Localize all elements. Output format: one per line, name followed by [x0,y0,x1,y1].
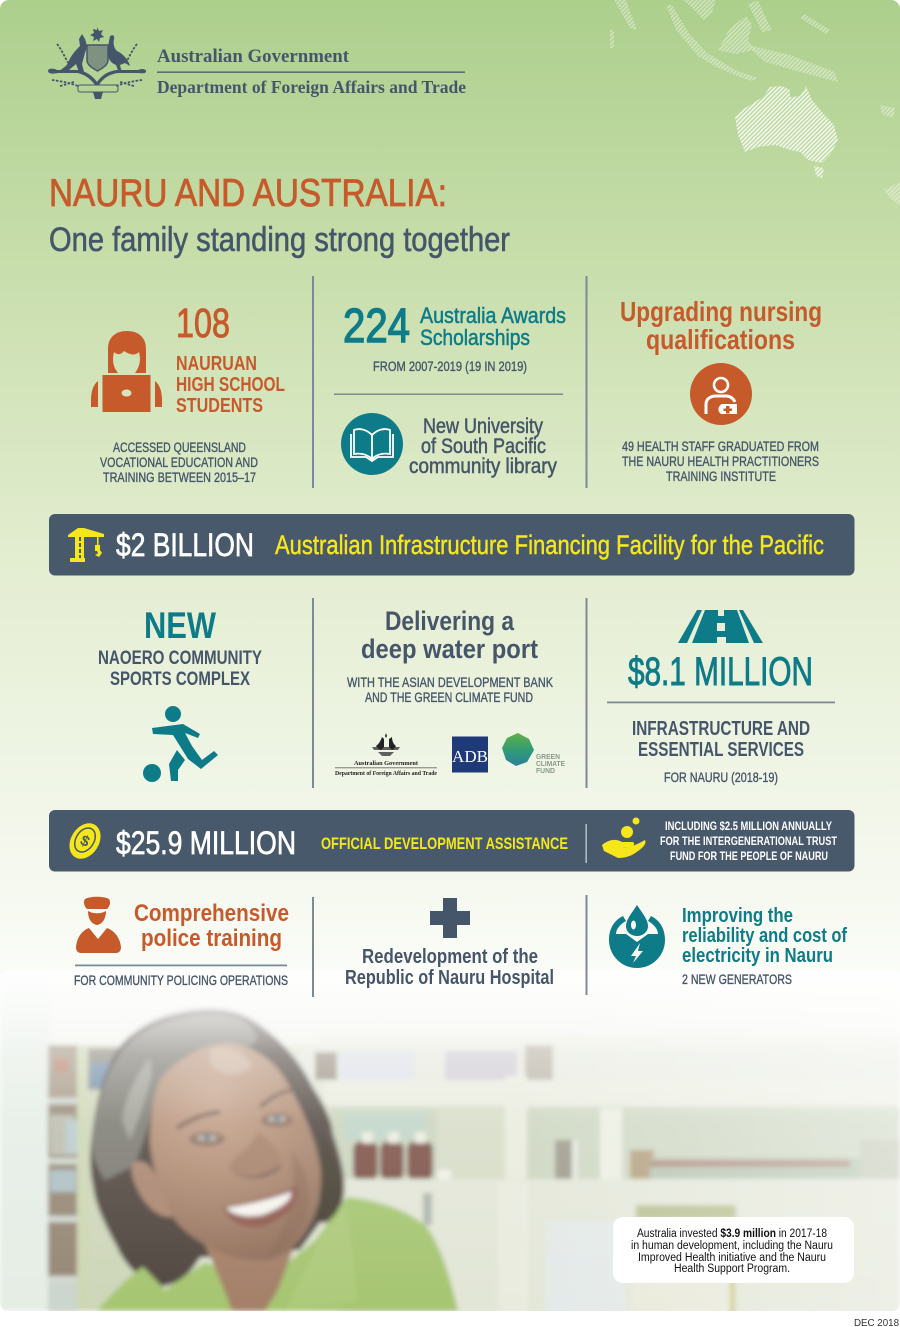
logo: Australian Government coat of arms [48,27,146,99]
upper shelf items [320,1035,900,1047]
label: Nauruan high school students [176,353,285,417]
title: NAURU AND AUSTRALIA: [49,172,447,215]
note [660,819,838,863]
label: sports complex: SPORTS COMPLEX [110,669,250,690]
heading: Comprehensive [134,900,289,927]
heading: upgrading nursing: qualifications [646,324,795,355]
heading: Redevelopment of the [362,945,538,968]
counter [340,1179,900,1314]
note: FOR THE INTERGENERATIONAL TRUST [660,834,838,848]
banner: $2 billion [49,514,854,576]
face [150,1043,321,1260]
callout: human development investment: Australia invested $3.9 million in 2017-18 [637,1228,827,1240]
description: AND THE GREEN CLIMATE FUND [365,690,533,705]
icon: police officer [76,897,121,953]
note: FUND FOR THE PEOPLE OF NAURU [670,849,828,863]
logo: ADB [452,736,488,772]
lower shelf interior [330,1109,900,1181]
heading: new: NEW [144,605,216,646]
panel: high school students [91,300,285,485]
heading: Australia Awards Scholarships: Australia Awards [420,303,566,328]
panel: sports complex [98,605,262,782]
callout: human development investment [613,1217,854,1283]
heading: Republic of Nauru Hospital [345,966,554,989]
left shelves [48,1045,78,1311]
description: WITH THE ASIAN DEVELOPMENT BANK [347,675,553,690]
period: FOR NAURU (2018-19) [664,770,778,785]
description: FOR COMMUNITY POLICING OPERATIONS [74,972,288,988]
description: ACCESSED QUEENSLAND [113,440,246,455]
heading: reliability and cost of [682,924,847,947]
note: 2 NEW GENERATORS [682,971,792,987]
divider: row 1 [312,276,588,488]
heading [345,945,554,989]
panel: scholarships and library [334,300,566,478]
amount: $8.1 MILLION [628,650,813,694]
note: INCLUDING $2.5 MILLION ANNUALLY [665,819,832,833]
panel: infrastructure funding [607,610,835,785]
description: TRAINING INSTITUTE [666,469,776,484]
heading: Australia Awards Scholarships: Scholarships [420,325,530,350]
heading: Australia Awards Scholarships [420,303,566,350]
amount: $25.9 MILLION [116,825,296,861]
logo: Green Climate Fund: CLIMATE [536,761,565,768]
statistic: 224: 224 [343,300,410,353]
icon: medical cross [430,898,470,938]
logo: Green Climate Fund [502,733,565,775]
logo: Green Climate Fund: GREEN [536,754,560,761]
banner: $25.9 million [49,810,854,872]
heading: electricity in Nauru [682,944,833,967]
eyes and brows [189,1132,225,1146]
divider: row 3 [312,895,588,997]
label: OFFICIAL DEVELOPMENT ASSISTANCE [321,834,568,853]
logo: DFAT small: Department of Foreign Affairs and Trade [335,771,437,777]
callout: human development investment: Health Support Program. [674,1263,790,1275]
label: Nauruan high school students: NAURUAN [176,353,257,375]
callout: human development investment: Improved Health initiative and the Nauru [638,1252,826,1264]
map: Indonesia and Australia in stripes [610,0,900,205]
description [347,675,553,705]
icon: soccer player [143,706,218,782]
photo: smiling woman in a pharmacy [0,1007,900,1311]
description [622,439,819,484]
icon: nurse [690,363,752,425]
icon: road [678,610,763,643]
description: THE NAURU HEALTH PRACTITIONERS [622,454,819,469]
heading: upgrading nursing: Upgrading nursing [620,296,822,327]
label: Nauruan high school students: STUDENTS [176,395,263,417]
description: 49 HEALTH STAFF GRADUATED FROM [622,439,819,454]
neck [203,1240,293,1311]
heading: deep water port: Delivering a [385,606,515,636]
label [632,718,810,761]
panel: deep water port [335,606,565,777]
logo: DFAT small [335,733,437,777]
label: INFRASTRUCTURE AND [632,718,810,740]
nose [231,1134,276,1172]
panel: police training [74,897,289,988]
heading: community library: community library [409,455,557,478]
heading: community library [409,415,557,478]
heading: deep water port [361,606,538,664]
logo: DFAT small: Australian Government [354,760,419,767]
panel: hospital [345,898,554,989]
icon: open book [341,413,403,475]
statistic: 108: 108 [176,300,230,346]
date note: FROM 2007-2019 (19 IN 2019) [373,359,527,374]
icon: crane [68,528,104,562]
logo: Green Climate Fund: FUND [536,768,555,775]
amount: $2 BILLION [116,527,254,563]
heading: community library: of South Pacific [421,435,546,458]
label: sports complex [98,648,262,690]
icon: water and power [609,905,665,968]
heading: Improving the [682,904,793,927]
shelf hair curl [318,1142,340,1219]
description [100,440,258,485]
description: VOCATIONAL EDUCATION AND [100,455,258,470]
label: Nauruan high school students: HIGH SCHOOL [176,374,285,396]
shelf band [330,1079,598,1102]
logo text: Australian Government [157,47,466,97]
logo text: Australian Government: Australian Government [157,47,350,67]
logo: ADB: ADB [452,747,488,766]
description: TRAINING BETWEEN 2015–17 [103,470,256,485]
icon: coin [63,817,107,865]
callout: human development investment: in human development, including the Nauru [631,1240,833,1252]
ear [132,1161,172,1217]
heading: community library: New University [423,415,543,438]
logo text: Australian Government: Department of Foreign Affairs and Trade [157,77,466,97]
panel: electricity [609,904,847,987]
subtitle: One family standing strong together [49,221,510,259]
icon: hand with coins [602,818,646,858]
bottles [353,1141,378,1180]
heading: police training [141,925,282,952]
icon: coin: $ [77,832,93,851]
white wash [0,970,900,1311]
heading: deep water port: deep water port [361,634,538,664]
heading [134,900,289,952]
label: ESSENTIAL SERVICES [638,739,804,761]
divider: row 2 [312,598,588,788]
icon: student with laptop [91,331,162,412]
heading: upgrading nursing [620,296,822,355]
shirt [97,1197,458,1311]
panel: nursing qualifications [620,296,822,484]
hair back [90,1008,345,1287]
mouth [222,1186,298,1227]
heading [682,904,847,967]
label: sports complex: NAOERO COMMUNITY [98,648,262,669]
